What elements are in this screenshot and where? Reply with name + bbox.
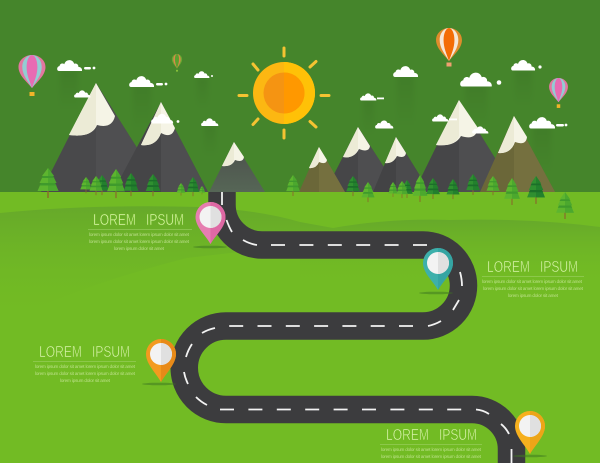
heading: IPSUM (439, 427, 477, 444)
mountain E (480, 116, 555, 192)
heading: LOREM (487, 259, 530, 276)
label block 3: lorem ipsum dolor sit amet lorem ipsum dolor sit amet (35, 371, 136, 376)
body text: lorem ipsum dolor sit amet lorem ipsum dolor sit amet (381, 447, 482, 452)
road surface (184, 192, 512, 463)
tree (556, 192, 574, 219)
tree (199, 186, 205, 194)
tree (446, 179, 460, 199)
label block 4: lorem ipsum dolor sit amet lorem ipsum dolor sit amet (381, 454, 482, 459)
heading: IPSUM (92, 344, 130, 361)
right hill (300, 220, 600, 285)
body text: lorem ipsum dolor sit amet lorem ipsum dolor sit amet (35, 364, 136, 369)
label block 3: lorem ipsum dolor sit amet (60, 378, 111, 383)
body text: lorem ipsum dolor sit amet lorem ipsum dolor sit amet (482, 279, 583, 284)
tree (413, 175, 427, 202)
cloud 8 (360, 93, 384, 100)
mountains left group (41, 83, 265, 192)
mountain D (414, 100, 516, 192)
label block 1: lorem ipsum dolor sit amet lorem ipsum dolor sit amet (89, 239, 190, 244)
balloon: pink right (549, 78, 568, 108)
tree (107, 169, 125, 198)
heading: LOREM (93, 212, 136, 229)
pin: yellow (515, 411, 545, 454)
pin: teal (423, 248, 453, 290)
cloud 6 (201, 118, 218, 126)
cloud 9 (375, 121, 393, 128)
tree (80, 177, 92, 193)
cloud 14 (529, 117, 567, 128)
heading: IPSUM (146, 212, 184, 229)
long soft shadows (60, 70, 551, 172)
pin ground shadows (142, 246, 547, 457)
heading: LOREM (39, 344, 82, 361)
tree (466, 174, 480, 195)
heading: IPSUM (540, 259, 578, 276)
balloon: orange (436, 28, 462, 66)
pin: orange (146, 339, 176, 382)
heading: LOREM (386, 427, 429, 444)
mountain B (325, 127, 400, 192)
tree (177, 183, 185, 196)
tree (388, 182, 398, 197)
sky background (0, 0, 600, 192)
tree (124, 173, 138, 196)
label block 4 (380, 427, 482, 459)
tree (426, 178, 440, 199)
clouds (57, 60, 567, 134)
tree (346, 176, 360, 196)
hills (0, 206, 600, 320)
cloud 1 (57, 60, 95, 71)
tree (396, 181, 408, 198)
mountain 3 (209, 142, 265, 192)
sun rays (239, 48, 329, 138)
tree (361, 182, 375, 202)
balloon: small green (172, 54, 182, 72)
label block 2 (482, 259, 584, 298)
cloud 3 (194, 71, 213, 78)
cloud 13 (511, 60, 542, 70)
tree (89, 176, 103, 195)
tree (401, 180, 413, 198)
cloud 10 (432, 114, 457, 122)
tree (286, 175, 300, 196)
sun (239, 48, 329, 138)
mountains right group (299, 100, 555, 192)
tree (504, 178, 520, 205)
grass ground (0, 192, 600, 463)
label block 3 (33, 344, 136, 383)
tree (527, 176, 545, 204)
sun disc (253, 62, 315, 124)
cloud 5 (151, 114, 179, 124)
tree (95, 175, 109, 195)
cloud 7 (393, 66, 418, 77)
cloud 11 (472, 126, 488, 134)
left hill (0, 206, 300, 320)
road (184, 192, 512, 463)
cloud 12 (460, 73, 501, 86)
tree (146, 174, 160, 196)
mountain A (299, 147, 345, 192)
balloon: pink left (18, 55, 46, 96)
label block 1 (88, 212, 192, 251)
tree (486, 176, 500, 195)
tree (187, 177, 199, 196)
label block 2: lorem ipsum dolor sit amet (508, 293, 559, 298)
cloud 2 (129, 76, 167, 87)
mountain 2 (113, 102, 208, 192)
label block 1: lorem ipsum dolor sit amet (114, 246, 165, 251)
cloud 4 (74, 90, 90, 98)
mountain C (373, 137, 430, 192)
road centre dashes (184, 192, 512, 463)
label block 2: lorem ipsum dolor sit amet lorem ipsum dolor sit amet (483, 286, 584, 291)
trees (38, 168, 574, 219)
tree (38, 168, 58, 198)
pin: pink (196, 202, 226, 244)
body text: lorem ipsum dolor sit amet lorem ipsum dolor sit amet (89, 232, 190, 237)
mountain 1 (41, 83, 165, 192)
